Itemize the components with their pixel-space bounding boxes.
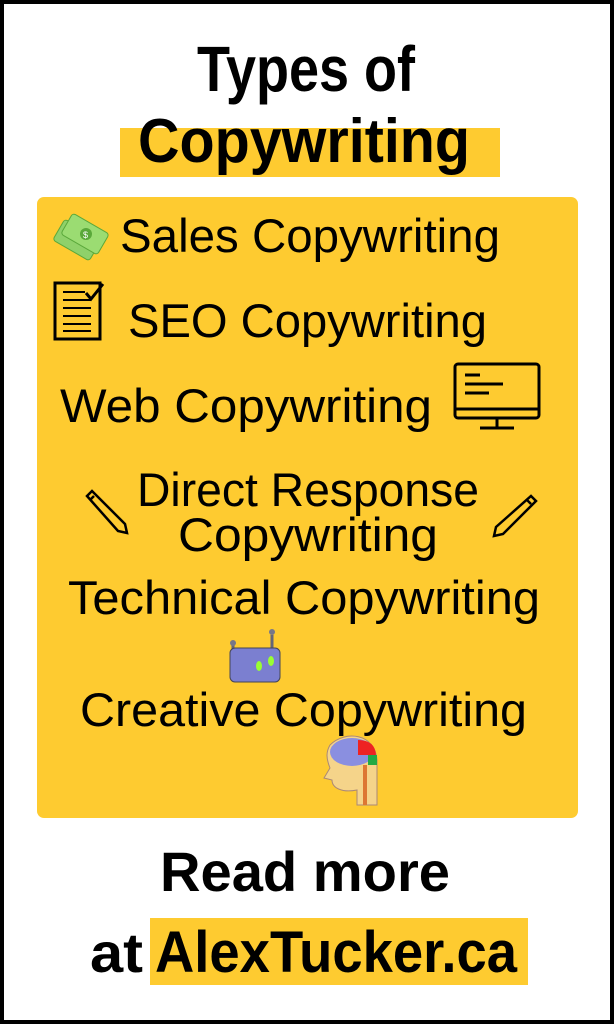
text: web: Web Copywriting xyxy=(60,379,432,432)
footer text: Read more xyxy=(160,840,450,903)
footer text: at xyxy=(90,921,143,984)
icon: brain head xyxy=(324,736,377,805)
text: direct response: Direct Response xyxy=(137,463,479,516)
icon: robot xyxy=(230,629,280,682)
title: Types of xyxy=(197,33,416,105)
icon: checklist xyxy=(55,283,103,339)
text: creative: Creative Copywriting xyxy=(80,683,527,736)
icon: pencil left xyxy=(87,491,127,533)
text: copywriting: Copywriting xyxy=(178,508,438,561)
text: technical: Technical Copywriting xyxy=(68,571,540,624)
footer highlight xyxy=(150,918,528,985)
title highlight xyxy=(120,128,500,177)
footer text xyxy=(90,840,528,985)
icon: money: $ xyxy=(83,230,88,240)
title xyxy=(120,33,500,177)
icon: pencil right xyxy=(494,496,536,536)
panel: types list xyxy=(37,197,578,818)
title: Copywriting xyxy=(138,107,470,176)
footer text: AlexTucker.ca xyxy=(155,920,518,985)
text: sales: Sales Copywriting xyxy=(120,209,500,262)
icon: money xyxy=(53,213,109,261)
icon: monitor xyxy=(455,364,539,428)
text: seo: SEO Copywriting xyxy=(128,294,487,347)
